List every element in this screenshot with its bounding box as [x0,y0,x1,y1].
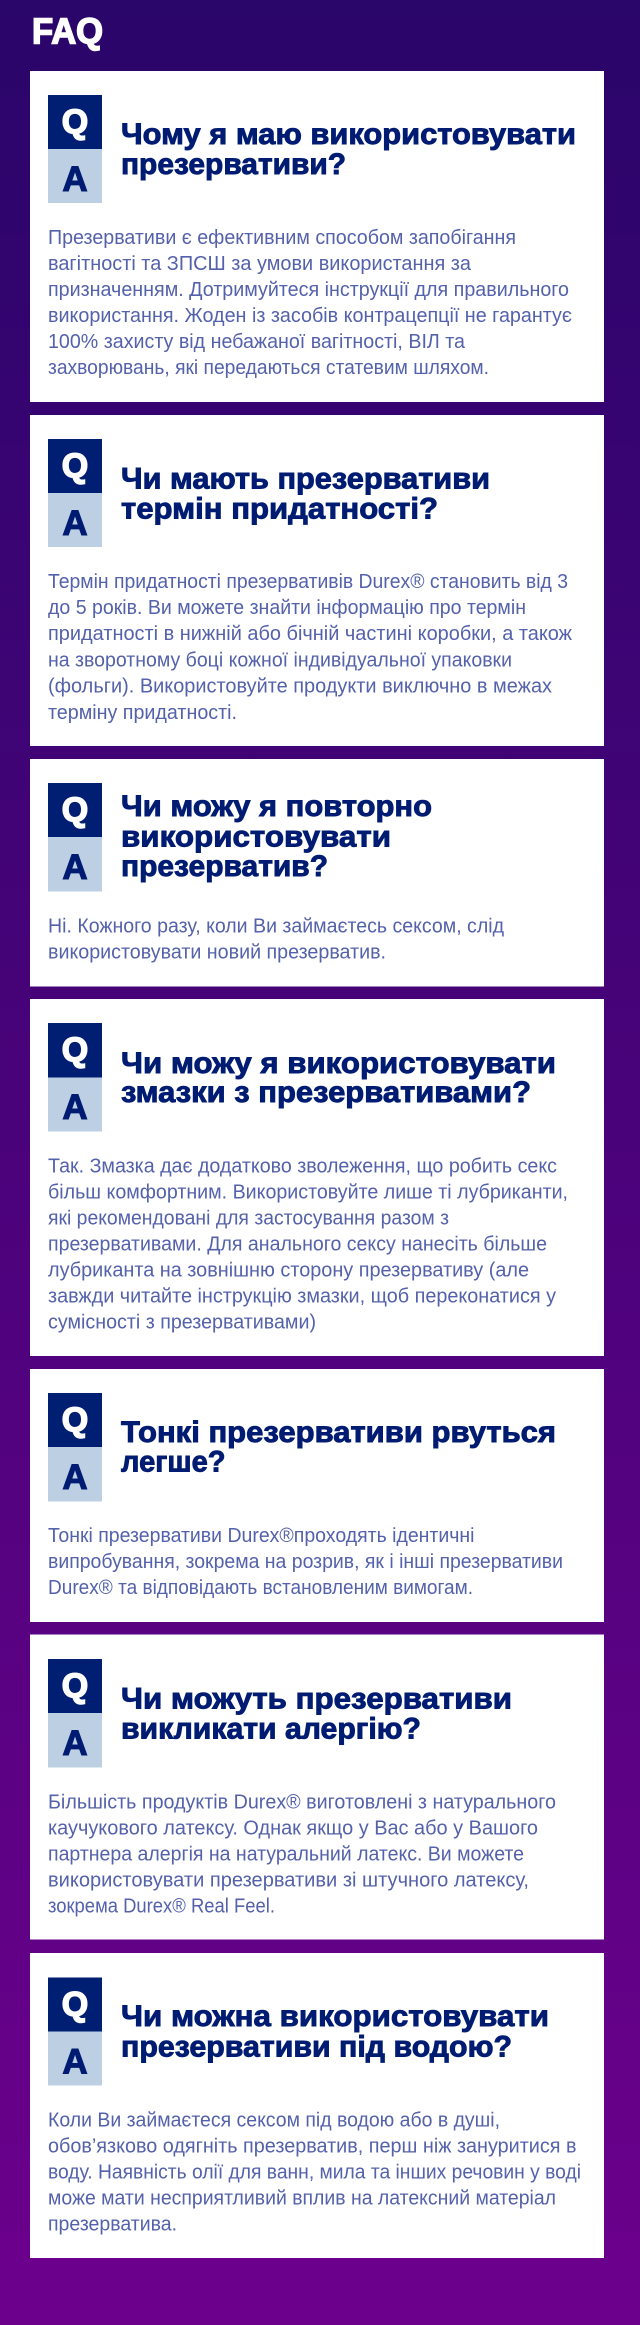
heading: використовувати [121,820,391,854]
answer text: лубриканта на зовнішню сторону презервативу (але [48,1260,529,1282]
heading: Чому я маю використовувати [121,118,576,151]
panel: lubricants [30,999,604,1356]
answer text: (фольги). Використовуйте продукти виключно в межах [48,676,552,698]
answer text: Так. Змазка дає додатково зволеження, що робить секс [48,1156,557,1178]
heading [121,462,490,526]
icon: Q and A badge: Q [62,1401,88,1439]
answer text: терміну придатності. [48,702,237,724]
heading [121,790,432,883]
icon: Q and A badge: A [62,504,88,543]
icon: Q and A badge: A [62,160,88,199]
icon: Q and A badge: A [62,2042,88,2082]
answer text: випробування, зокрема на розрив, як і інші презервативи [48,1551,563,1573]
panel: under water [30,1953,604,2258]
heading [121,1416,556,1478]
panel: thin condoms [30,1369,604,1622]
heading: презерватив? [121,850,328,883]
answer text: використовувати новий презерватив. [48,942,386,964]
icon: Q and A badge [48,1393,102,1502]
heading: Чи можуть презервативи [121,1682,512,1716]
heading: легше? [121,1446,226,1478]
answer text: сумісності з презервативами) [48,1312,316,1334]
panel: expiry date [30,415,604,746]
heading: змазки з презервативами? [121,1076,531,1109]
answer text: може мати несприятливий вплив на латексний матеріал [48,2188,556,2210]
heading: Тонкі презервативи рвуться [121,1416,556,1449]
panel: allergy [30,1634,604,1940]
icon: Q and A badge [48,1978,102,2086]
answer text [48,1525,563,1599]
answer text: Термін придатності презервативів Durex® становить від 3 [48,571,568,593]
answer text [48,916,504,964]
answer text: 100% захисту від небажаної вагітності, ВІЛ та [48,331,466,353]
icon: Q and A badge [48,439,102,547]
answer text: каучукового латексу. Однак якщо у Вас або у Вашого [48,1818,538,1840]
icon: Q and A badge [48,1023,102,1132]
answer text: до 5 років. Ви можете знайти інформацію про термін [48,597,526,619]
icon: Q and A badge: A [62,1724,88,1763]
answer text: які рекомендовані для застосування разом з [48,1208,449,1230]
answer text [48,571,573,724]
answer text: захворювань, які передаються статевим шляхом. [48,357,489,379]
icon: Q and A badge: A [62,848,88,887]
answer text [48,1156,568,1334]
heading [121,118,576,181]
answer text: презерватива. [48,2214,177,2236]
answer text: завжди читайте інструкцію змазки, щоб переконатися у [48,1286,556,1308]
answer text: воду. Наявність олії для ванн, мила та інших речовин у воді [48,2162,581,2184]
answer text: призначенням. Дотримуйтеся інструкції для правильного [48,279,569,301]
icon: Q and A badge: Q [62,1031,88,1069]
heading: презервативи під водою? [121,2030,512,2064]
answer text: використовувати презервативи зі штучного латексу, [48,1870,529,1892]
heading: термін придатності? [121,492,438,526]
heading: Чи мають презервативи [121,462,490,496]
panel: reuse [30,759,604,986]
answer text: вагітності та ЗПСШ за умови використання за [48,253,472,275]
heading [121,1047,556,1109]
answer text [48,1792,556,1918]
answer text: більш комфортним. Використовуйте лише ті лубриканти, [48,1182,568,1204]
icon: Q and A badge: A [62,1458,88,1497]
answer text: придатності в нижній або бічній частині коробки, а також [48,623,573,645]
icon: Q and A badge: Q [62,791,88,829]
answer text: Коли Ви займаєтеся сексом під водою або в душі, [48,2110,500,2132]
answer text: Ні. Кожного разу, коли Ви займаєтесь сексом, слід [48,916,504,938]
icon: Q and A badge: Q [62,103,88,141]
icon: Q and A badge [48,783,102,892]
icon: Q and A badge: A [62,1088,88,1127]
answer text: використання. Жоден із засобів контрацепції не гарантує [48,305,572,327]
answer text: обов’язково одягніть презерватив, перш ніж зануритися в [48,2136,576,2158]
heading [121,1682,512,1746]
answer text [48,227,572,379]
answer text: Презервативи є ефективним способом запобігання [48,227,516,249]
answer text: Durex® та відповідають встановленим вимогам. [48,1577,473,1599]
answer text: на зворотному боці кожної індивідуальної упаковки [48,650,512,672]
heading: презервативи? [121,148,346,181]
answer text: презервативами. Для анального сексу нанесіть більше [48,1234,547,1256]
answer text: партнера алергія на натуральний латекс. Ви можете [48,1844,524,1866]
title: FAQ [32,10,103,52]
icon: Q and A badge [48,95,102,203]
icon: Q and A badge: Q [62,1667,88,1705]
heading: Чи можу я повторно [121,790,432,823]
icon: Q and A badge: Q [62,1986,88,2024]
heading: Чи можу я використовувати [121,1047,556,1080]
icon: Q and A badge [48,1659,102,1768]
answer text [48,2110,581,2236]
heading: Чи можна використовувати [121,2000,549,2033]
heading [121,2000,549,2064]
answer text: зокрема Durex® Real Feel. [48,1896,275,1918]
panel: why use condoms [30,71,604,402]
answer text: Більшість продуктів Durex® виготовлені з натурального [48,1792,556,1814]
icon: Q and A badge: Q [62,447,88,485]
answer text: Тонкі презервативи Durex®проходять ідентичні [48,1525,474,1547]
heading: викликати алергію? [121,1712,421,1746]
